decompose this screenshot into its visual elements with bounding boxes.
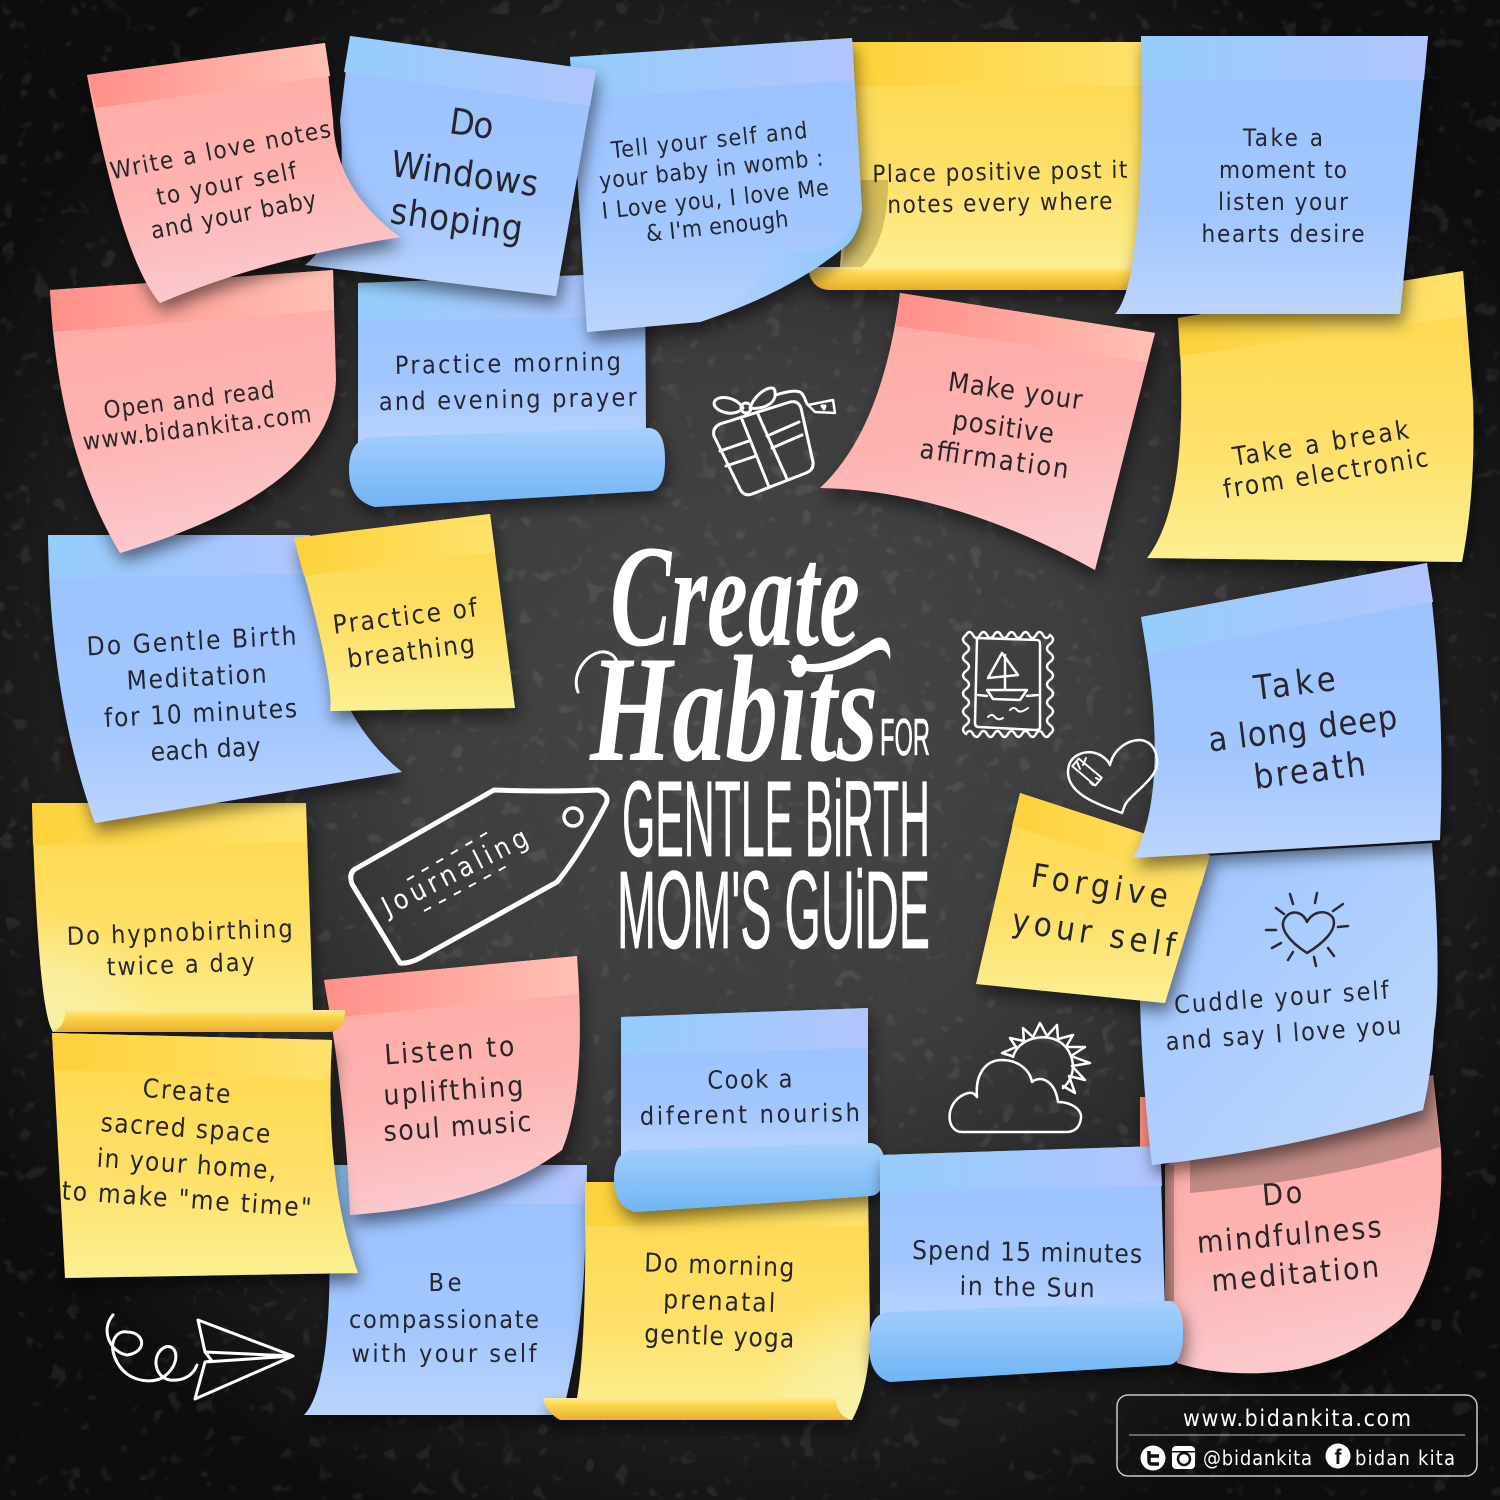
title line: Create: Create: [610, 515, 860, 677]
title: create habits for gentle birth mom's guide: [576, 515, 930, 972]
note: practice morning and evening prayer: and evening prayer: [379, 383, 638, 416]
icon: sun behind cloud: [950, 1023, 1090, 1132]
note: do mindfulness meditation: meditation: [1210, 1250, 1380, 1299]
note: take a long deep breath: breath: [1252, 744, 1368, 798]
website address: www.bidankita.com: [1183, 1406, 1411, 1432]
note: open and read bidankita: www.bidankita.com: [81, 400, 313, 456]
note: forgive your self: your self: [1009, 900, 1180, 965]
note: forgive your self: Forgive: [1029, 856, 1171, 916]
note: be compassionate with your self: Be: [428, 1268, 462, 1297]
label tag: journaling: [351, 790, 607, 963]
note: be compassionate with your self: compassionate: [349, 1305, 539, 1334]
note: do morning prenatal gentle yoga: prenatal: [663, 1285, 776, 1319]
note: cuddle your self: Cuddle your self: [1173, 975, 1391, 1019]
note: do windows shoping: Windows: [388, 144, 541, 205]
note: tell your self and your baby: I Love you, I love Me: [601, 175, 830, 225]
icon: twitter: [1140, 1446, 1166, 1470]
icon: heart with bandage: [1068, 740, 1157, 813]
note: take a long deep breath: a long deep: [1206, 698, 1399, 761]
note: do mindfulness meditation: [1140, 1075, 1441, 1373]
note: do windows shoping: shoping: [388, 191, 525, 250]
note: take a moment to listen: hearts desire: [1202, 220, 1364, 248]
note: take a long deep breath: [1133, 563, 1441, 858]
note: tell your self and your baby: & I'm enough: [645, 207, 790, 247]
note: do gentle birth meditation: [48, 535, 402, 823]
icon: gift box: [714, 388, 835, 495]
icon: paper plane with loop trail: [107, 1315, 293, 1399]
note: be compassionate with your self: [304, 1165, 587, 1415]
note: make your positive affirmation: Make your: [946, 367, 1084, 416]
note: take a break from electronic: [1147, 271, 1474, 562]
handle: facebook: bidan kita: [1355, 1446, 1455, 1470]
footer contact box: [1117, 1395, 1477, 1476]
note: cook a diferent nourish: Cook a: [707, 1064, 793, 1095]
note: do morning prenatal gentle yoga: Do morning: [644, 1248, 795, 1284]
note: practice of breathing: [294, 514, 515, 711]
note: do morning prenatal gentle yoga: [543, 1182, 870, 1420]
note: create sacred space: [52, 1033, 358, 1278]
note: spend 15 minutes in the sun: in the Sun: [959, 1272, 1095, 1304]
note: practice morning and evening prayer: [349, 273, 665, 507]
note: take a break from electronic: from electronic: [1221, 443, 1430, 505]
note: listen to uplifthing soul music: Listen to: [383, 1030, 515, 1072]
note: take a long deep breath: Take: [1251, 659, 1338, 709]
icon: postage stamp with boat: [963, 632, 1053, 737]
note: open and read bidankita: Open and read: [102, 376, 276, 424]
infographic canvas: MOM'S GUiDE: [617, 849, 930, 972]
note: do gentle birth meditation: each day: [150, 732, 261, 768]
note: tell your self and your baby: your baby in womb :: [598, 145, 825, 195]
note: make your positive affirmation: [820, 293, 1155, 570]
note: do windows shoping: [305, 36, 596, 296]
note: listen to uplifthing soul music: [324, 956, 580, 1215]
note: take a moment to listen: Take a: [1242, 124, 1323, 152]
note: make your positive affirmation: affirmation: [918, 434, 1071, 485]
note: do mindfulness meditation: mindfulness: [1195, 1210, 1383, 1261]
note: write a love notes: and your baby: [148, 185, 319, 245]
note roll and text: do hypnobirthing: [53, 914, 345, 1032]
note roll and text: do hypnobirthing: twice a day: [106, 947, 255, 982]
handle: twitter and instagram: @bidankita: [1203, 1446, 1312, 1470]
note: tell your self and your baby: [570, 38, 862, 332]
note: place positive post it notes: notes every where: [887, 187, 1113, 219]
note: cook a diferent nourish: diferent nourish: [640, 1098, 860, 1131]
note: write a love notes: to your self: [154, 157, 300, 211]
note: create sacred space: in your home,: [96, 1144, 277, 1186]
note: make your positive affirmation: positive: [951, 405, 1056, 450]
infographic canvas: GENTLE BiRTH: [622, 758, 930, 879]
note: practice morning and evening prayer: Practice morning: [395, 347, 621, 380]
note: be compassionate with your self: with your self: [352, 1339, 538, 1368]
icon: instagram: [1172, 1446, 1195, 1469]
note: tell your self and your baby: Tell your self and: [609, 118, 809, 164]
icon: glowing heart: [1266, 893, 1348, 966]
note: do morning prenatal gentle yoga: gentle yoga: [644, 1319, 795, 1355]
icon: facebook: [1326, 1444, 1350, 1469]
note: do windows shoping: Do: [447, 101, 496, 148]
title line: Habits: Habits: [589, 625, 878, 793]
note: practice of breathing: breathing: [346, 629, 476, 675]
note: practice of breathing: Practice of: [331, 593, 480, 641]
note: place positive post it notes: [808, 42, 1143, 290]
label tag: journaling: Journaling: [375, 822, 533, 923]
note: spend 15 minutes in the sun: Spend 15 minutes: [912, 1236, 1142, 1270]
note: cuddle your self: and say I love you: [1165, 1011, 1402, 1056]
note: do hypnobirthing twice a day: [32, 803, 313, 1032]
note: cook a diferent nourish: [614, 1008, 885, 1212]
note: place positive post it notes: Place positive post it: [872, 156, 1128, 188]
icon: facebook: f: [1334, 1446, 1342, 1469]
note: take a moment to listen: [1115, 36, 1428, 314]
note roll and text: do hypnobirthing: Do hypnobirthing: [66, 914, 293, 951]
note: take a moment to listen: listen your: [1218, 188, 1348, 216]
note: take a break from electronic: Take a break: [1230, 415, 1411, 473]
infographic canvas: FOR: [880, 709, 930, 767]
note: take a moment to listen: moment to: [1219, 156, 1347, 184]
note: write a love notes: [87, 43, 400, 303]
note: write a love notes: Write a love notes: [108, 115, 333, 185]
note: open and read bidankita: [50, 270, 336, 553]
title swash on H: [576, 652, 620, 692]
note: listen to uplifthing soul music: uplifthing: [382, 1069, 524, 1112]
note: create sacred space: to make "me time": [61, 1176, 312, 1224]
note: listen to uplifthing soul music: soul music: [382, 1105, 532, 1148]
note: cuddle your self: [1140, 843, 1438, 1165]
note: create sacred space: Create: [142, 1074, 231, 1110]
note: do gentle birth meditation: Meditation: [126, 659, 267, 697]
note: forgive your self: [976, 793, 1210, 1003]
note: do mindfulness meditation: Do: [1261, 1175, 1304, 1214]
title flourish: [787, 638, 890, 672]
note: create sacred space: sacred space: [100, 1108, 271, 1150]
note: do gentle birth meditation: Do Gentle Birth: [86, 622, 297, 662]
note: do gentle birth meditation: for 10 minutes: [103, 694, 298, 734]
note: spend 15 minutes in the sun: [869, 1146, 1183, 1382]
